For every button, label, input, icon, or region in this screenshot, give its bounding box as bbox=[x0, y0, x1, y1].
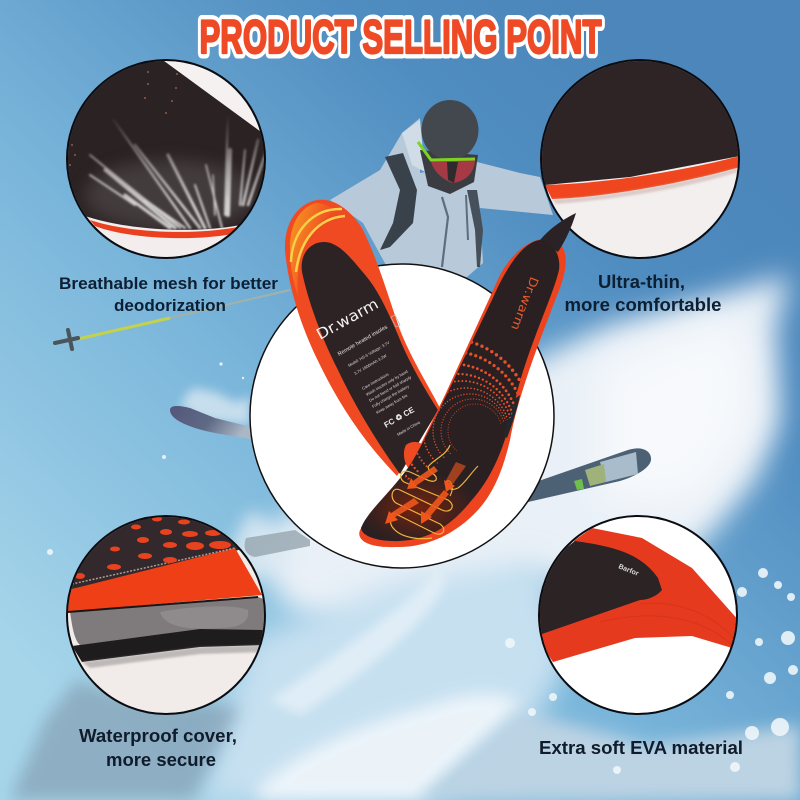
panel: waterproof cover circle bbox=[66, 515, 266, 715]
face and neck bbox=[420, 150, 478, 194]
skis bbox=[170, 406, 651, 557]
right insole heating wire bbox=[390, 445, 452, 539]
right insole brand: Dr.warm bbox=[508, 275, 541, 332]
left insole specifications: Wash insoles only by hand bbox=[365, 369, 409, 397]
right insole dot pattern bbox=[405, 340, 521, 480]
title: PRODUCT SELLING POINT bbox=[200, 10, 602, 63]
central white circle bbox=[250, 264, 554, 568]
left insole product name: Remote heated insoles bbox=[337, 324, 389, 358]
caption: deodorization: deodorization bbox=[114, 296, 226, 315]
left insole specifications: Model: HS-6 Voltage: 3.7V bbox=[347, 340, 391, 368]
grey snow mound bbox=[10, 680, 240, 800]
left insole specifications bbox=[347, 340, 412, 415]
ski pole bbox=[55, 290, 290, 349]
left insole specifications: Do not bend or fold sharply bbox=[368, 375, 412, 403]
right insole second wire bbox=[446, 466, 478, 496]
left insole brand: Dr.warm bbox=[313, 295, 381, 343]
left insole: underside bbox=[285, 200, 440, 476]
title bbox=[200, 10, 602, 63]
helmet bbox=[422, 100, 478, 160]
caption: extra soft EVA: Extra soft EVA material bbox=[539, 737, 743, 758]
snow spray near left ski bbox=[180, 388, 250, 425]
caption: waterproof cover: Waterproof cover, bbox=[79, 725, 237, 746]
caption: ultra-thin: Ultra-thin, bbox=[598, 271, 685, 292]
title: PRODUCT SELLING POINT bbox=[200, 10, 602, 63]
caption: breathable mesh: Breathable mesh for better bbox=[59, 274, 278, 293]
right insole heat arrows bbox=[385, 462, 466, 524]
main white snow spray bbox=[245, 275, 790, 650]
caption: more secure: more secure bbox=[106, 749, 216, 770]
left insole certification marks: FC ♻ CE bbox=[382, 405, 416, 430]
right insole: heating top bbox=[358, 213, 576, 547]
EVA brand mark: Barfor bbox=[617, 563, 640, 578]
caption: more comfortable: more comfortable bbox=[564, 294, 722, 315]
panel: ultra-thin circle bbox=[535, 55, 745, 265]
panel: EVA material circle bbox=[538, 515, 738, 715]
left insole origin: Made in China bbox=[396, 419, 422, 437]
backpack straps bbox=[380, 153, 417, 250]
skier bbox=[330, 100, 553, 277]
left insole specifications: 3.7V 1800mAh 3.2W bbox=[353, 353, 388, 376]
goggles bbox=[431, 159, 475, 183]
panel: breathable mesh circle bbox=[66, 59, 266, 259]
left insole specifications: Fully charge the battery bbox=[371, 384, 410, 409]
lower snow field bbox=[200, 560, 570, 800]
left insole specifications: Keep away from fire bbox=[375, 392, 409, 415]
left insole specifications: Care instructions bbox=[361, 372, 389, 391]
